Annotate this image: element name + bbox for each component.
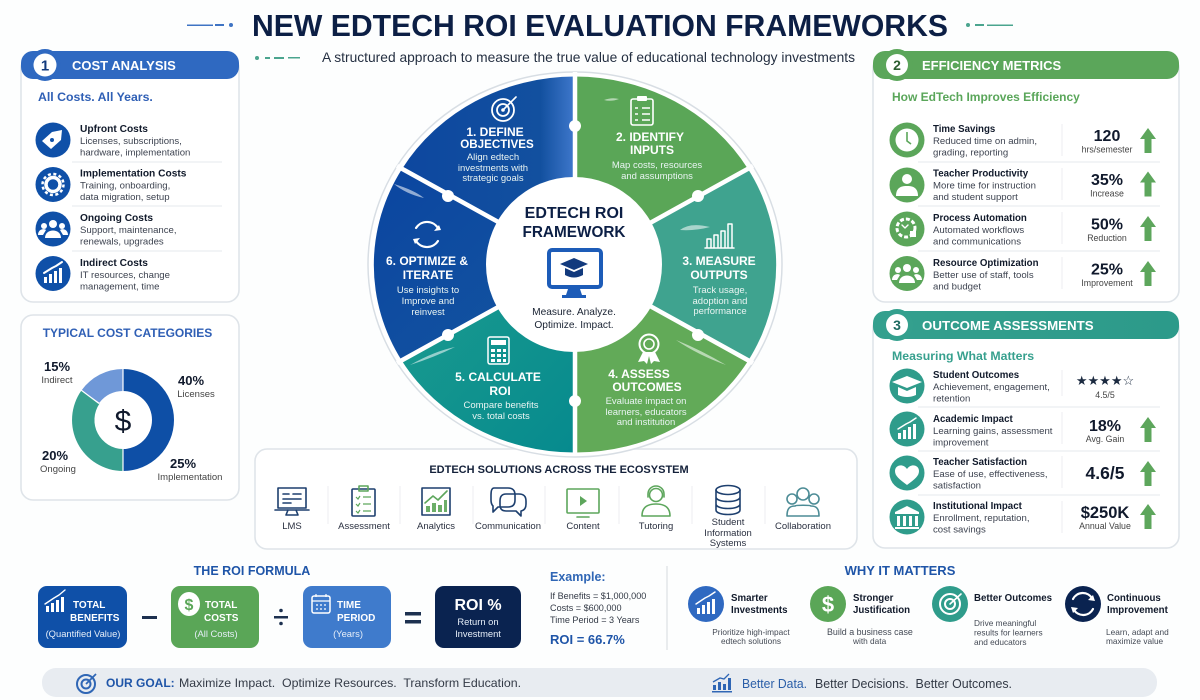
metric: student outcomes: 4.5/5 — [1095, 390, 1115, 400]
box: total costs: $ — [185, 597, 194, 614]
step 4 text — [605, 334, 687, 428]
metric: institutional impact: Institutional Impact — [933, 501, 1023, 512]
step 5 text: ROI — [489, 384, 511, 398]
cost analysis subtitle: All Costs. All Years. — [38, 90, 153, 104]
item: stronger justification: Justification — [853, 605, 910, 616]
box: total costs: TOTAL — [205, 600, 237, 611]
segment 5 — [402, 264, 575, 453]
item: indirect costs: Indirect Costs — [80, 258, 148, 269]
step 3 text — [682, 224, 756, 317]
metric: institutional impact: Annual Value — [1079, 521, 1131, 531]
item: ongoing costs: Support, maintenance, — [80, 225, 177, 236]
donut label 25%: 25% — [170, 456, 196, 471]
icon: collaboration — [775, 488, 831, 532]
metric: time savings: Time Savings — [933, 124, 995, 135]
cost analysis header: COST ANALYSIS — [72, 58, 176, 73]
segment 3 — [575, 169, 776, 361]
metric: process automation: Automated workflows — [933, 225, 1024, 236]
panel: efficiency metrics — [873, 49, 1179, 302]
framework wheel — [368, 72, 782, 457]
donut label 15% — [41, 359, 73, 386]
item: stronger justification: $ — [822, 592, 834, 617]
metric: process automation: Process Automation — [933, 213, 1027, 224]
box: total costs: COSTS — [204, 613, 239, 624]
metric: teacher satisfaction: satisfaction — [933, 480, 981, 492]
icon: tutoring: Tutoring — [639, 521, 673, 532]
item: continuous improvement: Learn, adapt and — [1106, 627, 1169, 637]
efficiency header — [873, 49, 1179, 81]
item: stronger justification: Stronger — [853, 593, 894, 604]
box: time period: PERIOD — [337, 613, 375, 624]
icon: chart — [712, 674, 732, 692]
metric: teacher satisfaction: Ease of use, effectiveness, — [933, 469, 1047, 480]
item: upfront costs: Upfront Costs — [80, 124, 148, 135]
donut label 20% — [40, 448, 76, 475]
item: smarter investments: Investments — [731, 605, 788, 616]
metric: time savings: grading, reporting — [933, 148, 1008, 158]
panel: why it matters — [688, 563, 1169, 647]
item: implementation costs: data migration, setup — [80, 192, 170, 203]
goal banner — [42, 668, 1157, 697]
item: better outcomes: results for learners — [974, 628, 1043, 638]
segment 2 — [575, 76, 748, 264]
efficiency header: 2 — [893, 57, 901, 73]
metric: student outcomes: Achievement, engagement, — [933, 382, 1050, 393]
step 3 text: OUTPUTS — [690, 268, 748, 282]
donut label 40% — [177, 373, 215, 400]
item: stronger justification — [810, 586, 913, 646]
item: continuous improvement: Improvement — [1107, 605, 1169, 616]
item: better outcomes — [932, 586, 1052, 647]
icon: tutoring — [639, 486, 673, 532]
donut label 40%: Licenses — [177, 389, 215, 400]
box: total benefits: TOTAL — [73, 600, 105, 611]
metric: process automation: Reduction — [1087, 233, 1127, 243]
step 6 text: ITERATE — [403, 268, 453, 282]
panel: edtech ecosystem — [255, 449, 857, 549]
box: total benefits: (Quantified Value) — [46, 628, 120, 639]
icon: assessment: Assessment — [338, 521, 390, 532]
metric: teacher productivity: and student support — [933, 192, 1018, 203]
icon: collaboration: Collaboration — [775, 521, 831, 532]
icon: student information systems: Student — [712, 517, 745, 528]
outcome header: OUTCOME ASSESSMENTS — [922, 318, 1094, 333]
donut label 25%: Implementation — [158, 472, 222, 483]
box: roi percent — [435, 586, 521, 648]
step 4 text: 4. ASSESS — [608, 367, 670, 381]
metric: teacher productivity: More time for instruction — [933, 180, 1036, 192]
box: time period: (Years) — [333, 628, 363, 639]
item: ongoing costs: Ongoing Costs — [80, 213, 153, 224]
item: continuous improvement: Continuous — [1107, 593, 1161, 604]
metric: teacher satisfaction — [890, 456, 1156, 492]
item: continuous improvement: maximize value — [1106, 636, 1164, 646]
goal statement: Maximize Impact. Optimize Resources. Transform Education. — [179, 676, 521, 690]
icon: communication — [475, 488, 541, 532]
metric: process automation: and communications — [933, 236, 1021, 248]
step 1 text: OBJECTIVES — [460, 138, 534, 151]
box: roi percent: ROI % — [454, 597, 502, 614]
segment 1 — [402, 76, 575, 264]
title decoration left — [187, 23, 233, 27]
donut chart — [72, 369, 174, 471]
outcome header: 3 — [893, 317, 901, 333]
metric: student outcomes: ★★★★☆ — [1076, 373, 1134, 388]
metric: time savings: 120 — [1094, 128, 1120, 145]
box: total benefits: BENEFITS — [70, 613, 120, 624]
example calculation: Time Period = 3 Years — [550, 615, 640, 625]
step 2 text: 2. IDENTIFY — [616, 130, 684, 144]
cost analysis header — [21, 49, 239, 81]
metric: institutional impact: Enrollment, reputation, — [933, 513, 1030, 524]
panel: cost analysis — [21, 49, 239, 302]
metric: academic impact: Avg. Gain — [1086, 434, 1124, 444]
metric: student outcomes: retention — [933, 394, 970, 404]
operator: equals — [405, 612, 421, 624]
metric: time savings: hrs/semester — [1082, 144, 1132, 154]
icon: communication: Communication — [475, 521, 541, 532]
metric: teacher satisfaction: Teacher Satisfaction — [933, 457, 1027, 468]
box: roi percent: Return on — [457, 616, 499, 627]
item: stronger justification: Build a business case — [827, 627, 913, 637]
metric: academic impact: 18% — [1089, 418, 1121, 435]
step 3 text: performance — [693, 306, 747, 317]
step 4 text: OUTCOMES — [612, 380, 682, 394]
step 5 text: vs. total costs — [472, 411, 530, 422]
step 6 text: 6. OPTIMIZE & — [386, 254, 468, 268]
step 6 text: Improve and — [402, 296, 454, 307]
metric: student outcomes — [890, 368, 1134, 404]
item: implementation costs — [36, 167, 187, 203]
icon: analytics: Analytics — [417, 521, 455, 532]
icon: student information systems: Information — [704, 528, 752, 539]
step 3 text: 3. MEASURE — [682, 254, 756, 268]
better data text: Better Data. — [742, 677, 807, 691]
wheel center — [486, 177, 662, 352]
step 1 text: investments with — [458, 163, 528, 174]
wheel center: Measure. Analyze. — [532, 307, 616, 318]
icon: student information systems — [704, 486, 752, 549]
metric: academic impact: Learning gains, assessment — [933, 426, 1053, 437]
item: upfront costs — [36, 122, 190, 158]
panel: roi formula — [38, 564, 521, 648]
metric: institutional impact: $250K — [1081, 504, 1129, 522]
step 1 text: strategic goals — [462, 173, 524, 184]
metric: process automation — [890, 212, 1156, 248]
item: upfront costs: hardware, implementation — [80, 148, 190, 158]
donut chart: $ — [115, 405, 132, 438]
donut label 40%: 40% — [178, 373, 204, 388]
item: better outcomes: Better Outcomes — [974, 593, 1052, 604]
icon: monitor with cap — [549, 250, 601, 298]
metric: institutional impact — [890, 500, 1156, 536]
efficiency header: EFFICIENCY METRICS — [922, 58, 1061, 73]
outcome subtitle: Measuring What Matters — [892, 349, 1034, 363]
donut label 20%: Ongoing — [40, 464, 76, 475]
metric: time savings: Reduced time on admin, — [933, 136, 1037, 147]
icon: assessment — [338, 486, 390, 532]
goal text: OUR GOAL: — [106, 676, 175, 690]
formula heading: THE ROI FORMULA — [194, 564, 310, 578]
metric: teacher satisfaction: 4.6/5 — [1086, 463, 1125, 483]
box: total benefits — [38, 586, 127, 648]
metric: student outcomes: Student Outcomes — [933, 370, 1019, 381]
icon: student information systems: Systems — [710, 538, 746, 549]
icon: content: Content — [566, 521, 600, 532]
outcome header — [873, 309, 1179, 341]
title: NEW EDTECH ROI EVALUATION FRAMEWORKS — [252, 8, 948, 43]
metric: resource optimization — [890, 256, 1156, 292]
step 2 text: INPUTS — [630, 143, 674, 157]
item: implementation costs: Training, onboarding, — [80, 180, 170, 192]
step 4 text: learners, educators — [605, 407, 687, 418]
step 4 text: Evaluate impact on — [606, 396, 686, 407]
metric: process automation: 50% — [1091, 216, 1123, 234]
step 3 text: adoption and — [693, 296, 747, 307]
step 5 text: 5. CALCULATE — [455, 370, 541, 384]
metric: academic impact: Academic Impact — [933, 414, 1013, 425]
operator: divide — [274, 609, 288, 625]
example calculation — [550, 570, 646, 647]
example calculation: Costs = $600,000 — [550, 603, 622, 613]
item: indirect costs: IT resources, change — [80, 270, 170, 281]
wheel center: Optimize. Impact. — [534, 320, 614, 331]
ecosystem heading: EDTECH SOLUTIONS ACROSS THE ECOSYSTEM — [429, 464, 689, 476]
item: stronger justification: with data — [852, 636, 887, 646]
title decoration right — [966, 23, 1013, 27]
item: indirect costs: management, time — [80, 282, 159, 292]
wheel center: FRAMEWORK — [522, 224, 626, 241]
box: time period: TIME — [337, 600, 361, 611]
item: indirect costs — [36, 256, 170, 292]
step 3 text: Track usage, — [693, 285, 747, 296]
metric: time savings — [890, 122, 1156, 158]
cost categories heading: TYPICAL COST CATEGORIES — [43, 326, 212, 340]
step 6 text: Use insights to — [397, 285, 459, 296]
item: better outcomes: Drive meaningful — [974, 618, 1036, 628]
icon: target — [77, 674, 96, 693]
donut label 15%: Indirect — [41, 375, 73, 386]
metric: academic impact — [890, 412, 1156, 448]
donut label 25% — [158, 456, 222, 483]
icon: LMS — [275, 488, 309, 532]
panel: outcome assessments — [873, 309, 1179, 548]
subtitle decoration — [255, 56, 300, 60]
item: smarter investments: edtech solutions — [721, 636, 781, 646]
box: total costs — [171, 586, 259, 648]
item: smarter investments: Prioritize high-impact — [712, 627, 790, 637]
panel: typical cost categories — [21, 315, 239, 500]
metric: resource optimization: and budget — [933, 282, 981, 292]
metric: resource optimization: Improvement — [1081, 278, 1133, 288]
item: upfront costs: Licenses, subscriptions, — [80, 136, 182, 147]
segment 6 — [374, 169, 575, 361]
box: roi percent: Investment — [455, 628, 501, 639]
item: implementation costs: Implementation Costs — [80, 168, 187, 180]
example calculation: ROI = 66.7% — [550, 632, 625, 647]
subtitle: A structured approach to measure the true value of educational technology investments — [322, 49, 855, 65]
metric: teacher productivity: Increase — [1090, 188, 1124, 198]
item: ongoing costs: renewals, upgrades — [80, 236, 164, 248]
example calculation: If Benefits = $1,000,000 — [550, 591, 646, 601]
box: time period — [303, 586, 391, 648]
step 2 text: Map costs, resources — [612, 160, 702, 171]
metric: resource optimization: 25% — [1091, 262, 1123, 278]
metric: resource optimization: Resource Optimization — [933, 258, 1039, 269]
item: smarter investments: Smarter — [731, 593, 768, 604]
operator: minus — [142, 616, 157, 619]
icon: analytics — [417, 488, 455, 532]
metric: institutional impact: cost savings — [933, 524, 986, 536]
step 6 text — [386, 222, 468, 318]
why heading: WHY IT MATTERS — [845, 563, 956, 578]
metric: resource optimization: Better use of staff, tools — [933, 270, 1034, 281]
step 2 text — [612, 96, 702, 182]
wheel center: EDTECH ROI — [525, 205, 623, 222]
segment 4 — [575, 264, 748, 453]
item: better outcomes: and educators — [974, 637, 1027, 647]
icon: content — [566, 489, 600, 532]
box: total costs: (All Costs) — [194, 628, 238, 639]
step 4 text: and institution — [617, 417, 675, 428]
metric: teacher productivity: Teacher Productivity — [933, 168, 1029, 180]
donut label 15%: 15% — [44, 359, 70, 374]
icon: LMS: LMS — [282, 521, 302, 532]
item: continuous improvement — [1065, 586, 1169, 646]
cost analysis header: 1 — [41, 58, 49, 74]
item: smarter investments — [688, 586, 790, 646]
metric: teacher productivity — [890, 168, 1156, 203]
step 1 text: 1. DEFINE — [466, 125, 524, 139]
step 5 text — [455, 337, 541, 422]
step 6 text: reinvest — [411, 307, 445, 318]
better decisions text: Better Decisions. Better Outcomes. — [815, 677, 1012, 691]
metric: academic impact: improvement — [933, 438, 989, 448]
efficiency subtitle: How EdTech Improves Efficiency — [892, 90, 1080, 104]
donut label 20%: 20% — [42, 448, 68, 463]
step 5 text: Compare benefits — [464, 400, 539, 411]
step 1 text: Align edtech — [467, 152, 519, 163]
example calculation: Example: — [550, 570, 606, 584]
step 1 text — [458, 97, 534, 184]
metric: teacher productivity: 35% — [1091, 172, 1123, 189]
step 2 text: and assumptions — [621, 171, 693, 182]
item: ongoing costs — [36, 212, 177, 248]
